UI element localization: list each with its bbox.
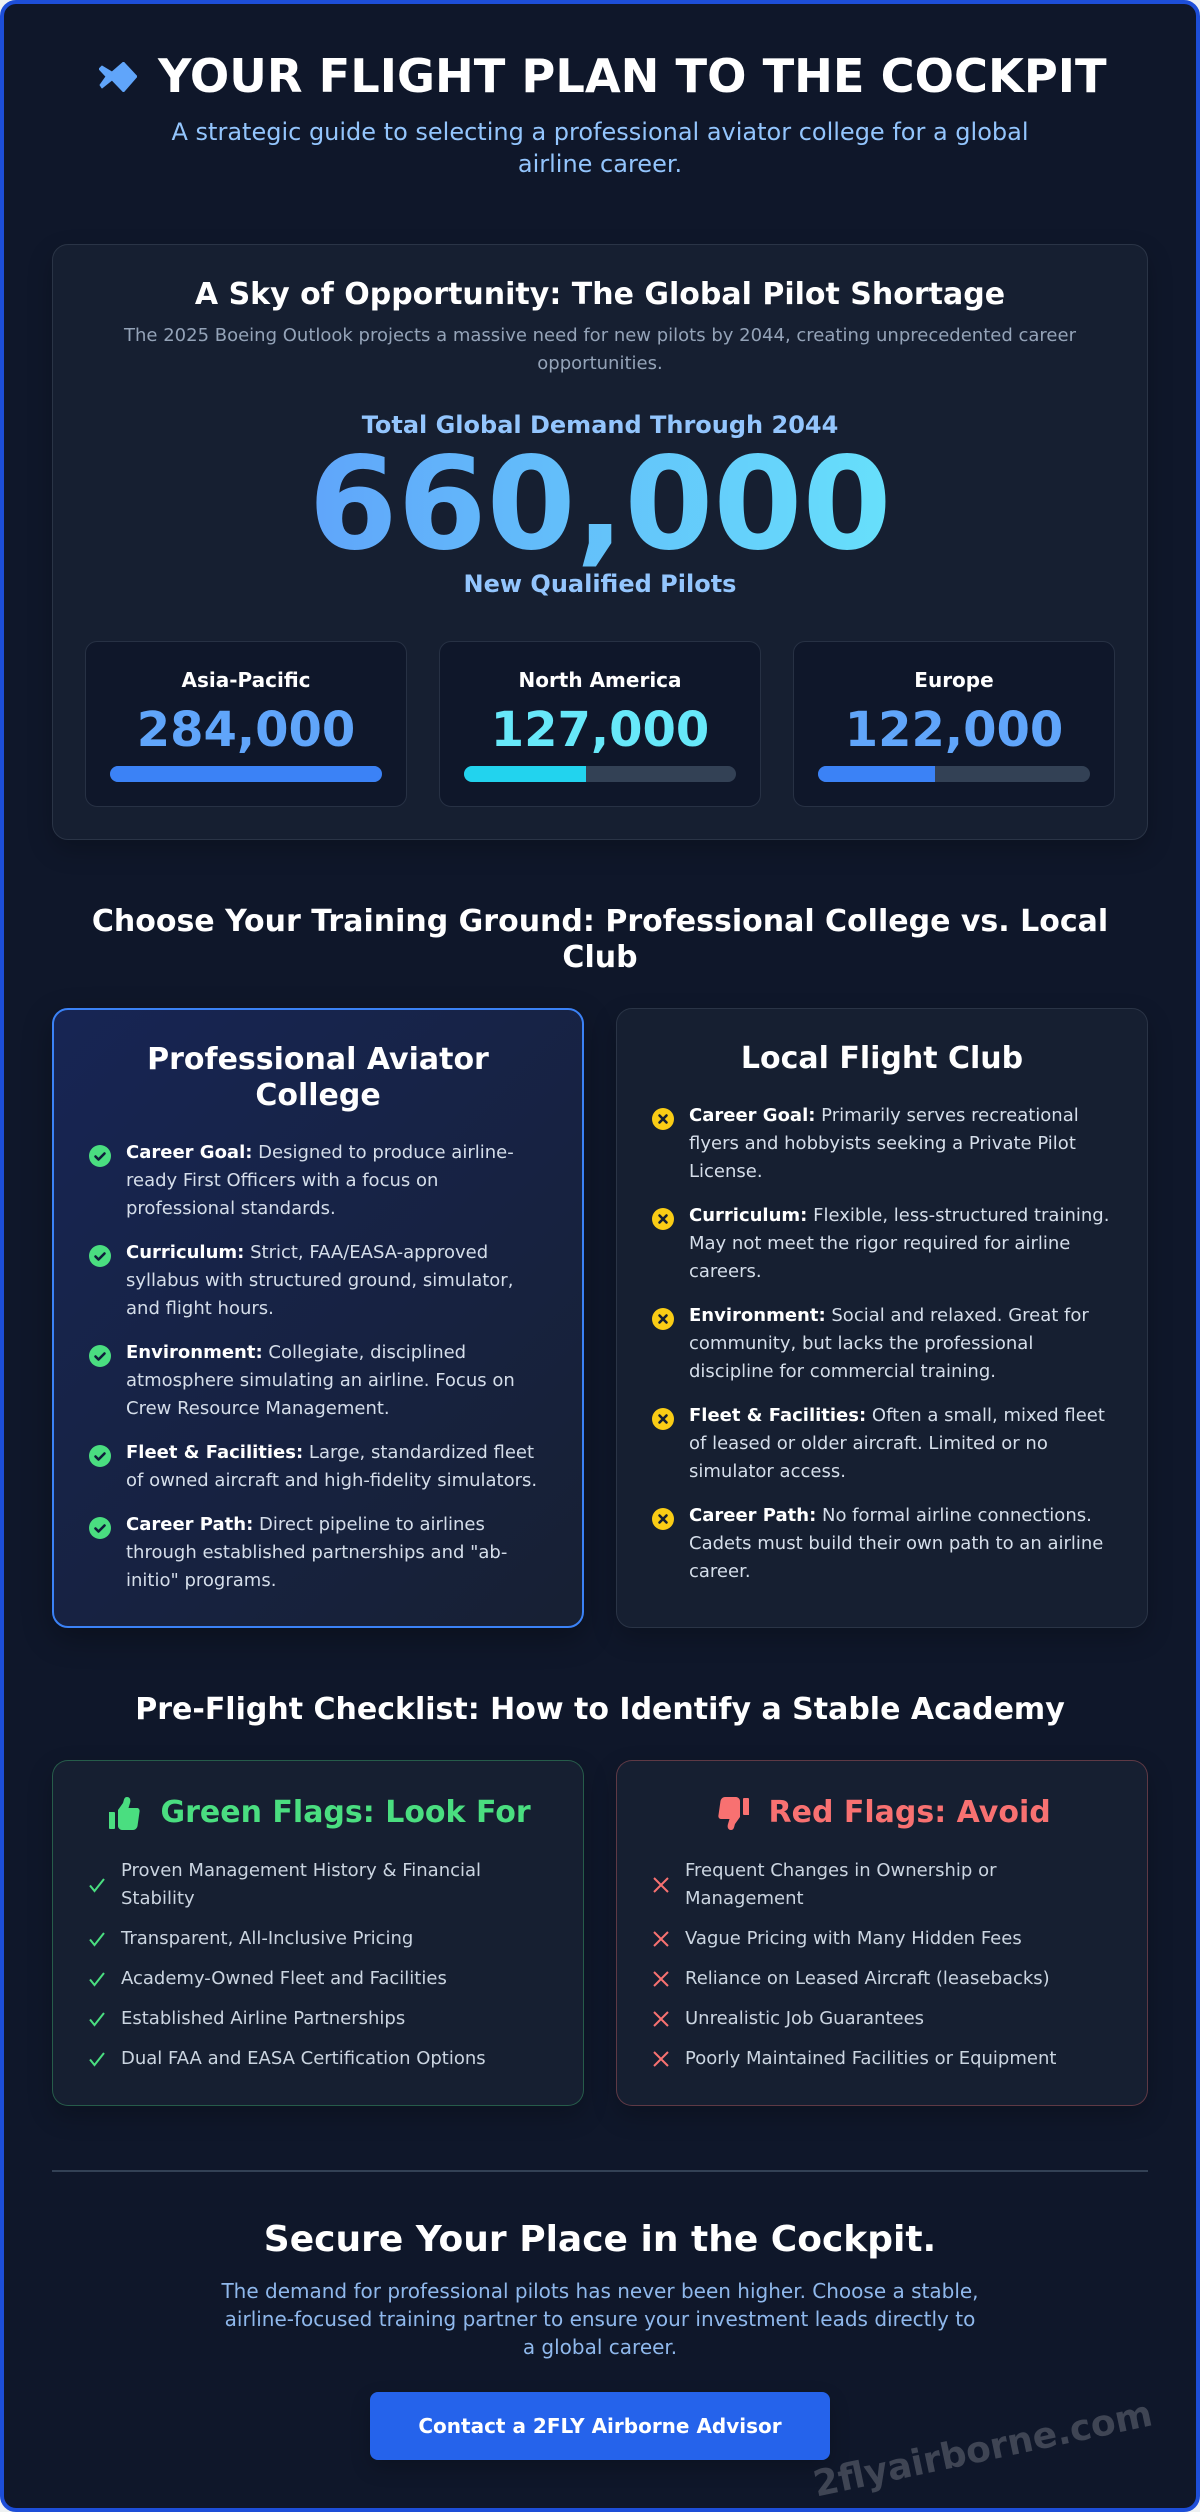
flag item: Poorly Maintained Facilities or Equipment	[685, 2048, 1056, 2069]
footer text: airline-focused training partner to ensure your investment leads directly to	[225, 2307, 975, 2331]
flag item	[653, 1965, 1113, 1993]
bar: North America	[464, 766, 736, 782]
item: career goal	[89, 1142, 514, 1218]
item: curriculum: syllabus with structured ground, simulator,	[126, 1270, 513, 1290]
icon: x	[652, 1108, 674, 1130]
footer text	[52, 2277, 1148, 2361]
icon: x	[653, 2050, 669, 2066]
item: career path: through established partnerships and "ab-	[126, 1542, 507, 1562]
icon: x	[652, 1408, 674, 1430]
flag item: Frequent Changes in Ownership or	[685, 1860, 996, 1881]
item: career goal: Career Goal: Primarily serves recreational	[689, 1104, 1079, 1126]
icon: check	[89, 1878, 105, 1892]
icon: x	[652, 1208, 674, 1230]
item: career path: Career Path: No formal airline connections.	[689, 1504, 1092, 1526]
panel heading: Professional Aviator	[147, 1042, 489, 1077]
item: career path: Cadets must build their own path to an airline	[689, 1532, 1103, 1554]
icon: check	[89, 2012, 105, 2026]
item: career goal: ready First Officers with a focus on	[126, 1170, 438, 1190]
panel heading: College	[255, 1078, 381, 1113]
flag item: Proven Management History & Financial	[121, 1860, 481, 1881]
item: environment: atmosphere simulating an airline. Focus on	[126, 1370, 515, 1390]
flag item: Unrealistic Job Guarantees	[685, 2008, 924, 2029]
stat: North America: 127,000	[491, 702, 709, 758]
description	[124, 324, 1076, 374]
icon: check	[89, 1445, 111, 1467]
item: career path: career.	[689, 1560, 751, 1582]
description: The 2025 Boeing Outlook projects a massive need for new pilots by 2044, creating unprecedented career	[124, 324, 1076, 346]
big number: 660,000	[308, 430, 892, 579]
item: career goal	[652, 1104, 1079, 1182]
item: environment	[89, 1342, 515, 1418]
item: career path	[89, 1514, 507, 1590]
item: career path: initio" programs.	[126, 1570, 276, 1590]
item: career goal: professional standards.	[126, 1198, 336, 1218]
item: curriculum: Curriculum: Flexible, less-structured training.	[689, 1204, 1109, 1226]
item: fleet and facilities: Fleet & Facilities: Large, standardized fleet	[126, 1442, 534, 1462]
item: curriculum: Curriculum: Strict, FAA/EASA-approved	[126, 1242, 488, 1262]
flag item	[653, 1925, 1113, 1953]
watermark: 2flyairborne.com	[810, 2394, 1156, 2505]
item: career goal: License.	[689, 1160, 763, 1182]
subtitle	[172, 118, 1028, 178]
footer text: The demand for professional pilots has never been higher. Choose a stable,	[221, 2279, 979, 2303]
item: career path	[652, 1504, 1103, 1582]
item: environment	[652, 1304, 1089, 1382]
item: curriculum	[89, 1242, 513, 1318]
item: environment: Environment: Social and relaxed. Great for	[689, 1304, 1089, 1326]
flag item: Management	[685, 1888, 804, 1909]
item: environment: Environment: Collegiate, disciplined	[126, 1342, 466, 1362]
panel: professional aviator college	[52, 1008, 584, 1628]
button	[370, 2392, 830, 2460]
heading: green flags: Green Flags: Look For	[160, 1795, 531, 1830]
icon: check	[89, 1517, 111, 1539]
item: fleet and facilities: simulator access.	[689, 1460, 846, 1482]
header	[99, 49, 1107, 178]
icon: thumbs down	[718, 1797, 749, 1830]
footer call to action	[52, 2170, 1148, 2462]
heading: training ground: Choose Your Training Ground: Professional College vs. Local	[92, 904, 1108, 939]
label: new qualified pilots: New Qualified Pilots	[464, 570, 736, 598]
panel: local flight club	[616, 1008, 1148, 1628]
icon: x	[652, 1508, 674, 1530]
icon: check	[89, 2052, 105, 2066]
flag item	[89, 1860, 481, 1909]
item: career goal: flyers and hobbyists seeking a Private Pilot	[689, 1132, 1076, 1154]
footer text: a global career.	[523, 2335, 677, 2359]
stat: Europe: 122,000	[845, 702, 1063, 758]
stat: Asia-Pacific: 284,000	[137, 702, 355, 758]
item: curriculum: and flight hours.	[126, 1298, 274, 1318]
flag item	[653, 2045, 1113, 2073]
item: curriculum	[652, 1204, 1109, 1282]
item: fleet and facilities	[89, 1442, 537, 1490]
stat: North America: North America	[518, 668, 682, 692]
icon: check	[89, 1245, 111, 1267]
item: fleet and facilities	[652, 1404, 1105, 1482]
heading: training ground: Club	[562, 940, 638, 975]
button: Contact a 2FLY Airborne Advisor	[418, 2414, 782, 2438]
flag item: Dual FAA and EASA Certification Options	[121, 2048, 486, 2069]
item: career path: Career Path: Direct pipeline to airlines	[126, 1514, 485, 1534]
icon: check	[89, 1145, 111, 1167]
flag item: Reliance on Leased Aircraft (leasebacks)	[685, 1968, 1050, 1989]
heading: sky of opportunity: A Sky of Opportunity: The Global Pilot Shortage	[195, 277, 1005, 312]
panel heading	[147, 1042, 489, 1113]
heading: pre-flight checklist: Pre-Flight Checklist: How to Identify a Stable Academy	[135, 1692, 1065, 1727]
item: curriculum: careers.	[689, 1260, 762, 1282]
icon: plane	[99, 62, 137, 92]
panel heading: Local Flight Club	[741, 1040, 1023, 1076]
stat: Europe: Europe	[914, 668, 994, 692]
title: YOUR FLIGHT PLAN TO THE COCKPIT	[158, 49, 1107, 103]
item: environment: Crew Resource Management.	[126, 1398, 390, 1418]
stat: North America	[439, 641, 761, 807]
panel: green flags	[52, 1760, 584, 2106]
panel: global pilot shortage	[52, 244, 1148, 840]
item: curriculum: May not meet the rigor required for airline	[689, 1232, 1070, 1254]
icon: thumbs up	[109, 1797, 140, 1830]
icon: x	[653, 2010, 669, 2026]
item: fleet and facilities: of owned aircraft and high-fidelity simulators.	[126, 1470, 537, 1490]
subtitle: A strategic guide to selecting a professional aviator college for a global	[172, 118, 1028, 146]
flag item: Academy-Owned Fleet and Facilities	[121, 1968, 447, 1989]
bar: Asia-Pacific	[110, 766, 382, 782]
stat: Asia-Pacific	[85, 641, 407, 807]
description: opportunities.	[537, 352, 663, 374]
item: environment: community, but lacks the professional	[689, 1332, 1033, 1354]
heading: training ground	[92, 904, 1108, 975]
icon: x	[653, 1970, 669, 1986]
item: fleet and facilities: Fleet & Facilities: Often a small, mixed fleet	[689, 1404, 1105, 1426]
icon: x	[652, 1308, 674, 1330]
flag item: Vague Pricing with Many Hidden Fees	[685, 1928, 1022, 1949]
icon: check	[89, 1932, 105, 1946]
flag item: Established Airline Partnerships	[121, 2008, 405, 2029]
panel: red flags	[616, 1760, 1148, 2106]
stat: Asia-Pacific: Asia-Pacific	[181, 668, 311, 692]
icon: check	[89, 1972, 105, 1986]
label: total demand: Total Global Demand Through 2044	[362, 411, 838, 439]
flag item	[653, 1857, 1113, 1913]
icon: check	[89, 1345, 111, 1367]
stat: Europe	[793, 641, 1115, 807]
subtitle: airline career.	[518, 150, 682, 178]
icon: x	[653, 1930, 669, 1946]
flag item: Transparent, All-Inclusive Pricing	[121, 1928, 413, 1949]
flag item	[653, 2005, 1113, 2033]
item: career goal: Career Goal: Designed to produce airline-	[126, 1142, 514, 1162]
heading: red flags: Red Flags: Avoid	[768, 1795, 1051, 1830]
flag item: Stability	[121, 1888, 195, 1909]
footer heading: Secure Your Place in the Cockpit.	[264, 2219, 936, 2260]
bar: Europe	[818, 766, 1090, 782]
icon: x	[653, 1877, 669, 1893]
item: environment: discipline for commercial training.	[689, 1360, 996, 1382]
item: fleet and facilities: of leased or older aircraft. Limited or no	[689, 1432, 1048, 1454]
